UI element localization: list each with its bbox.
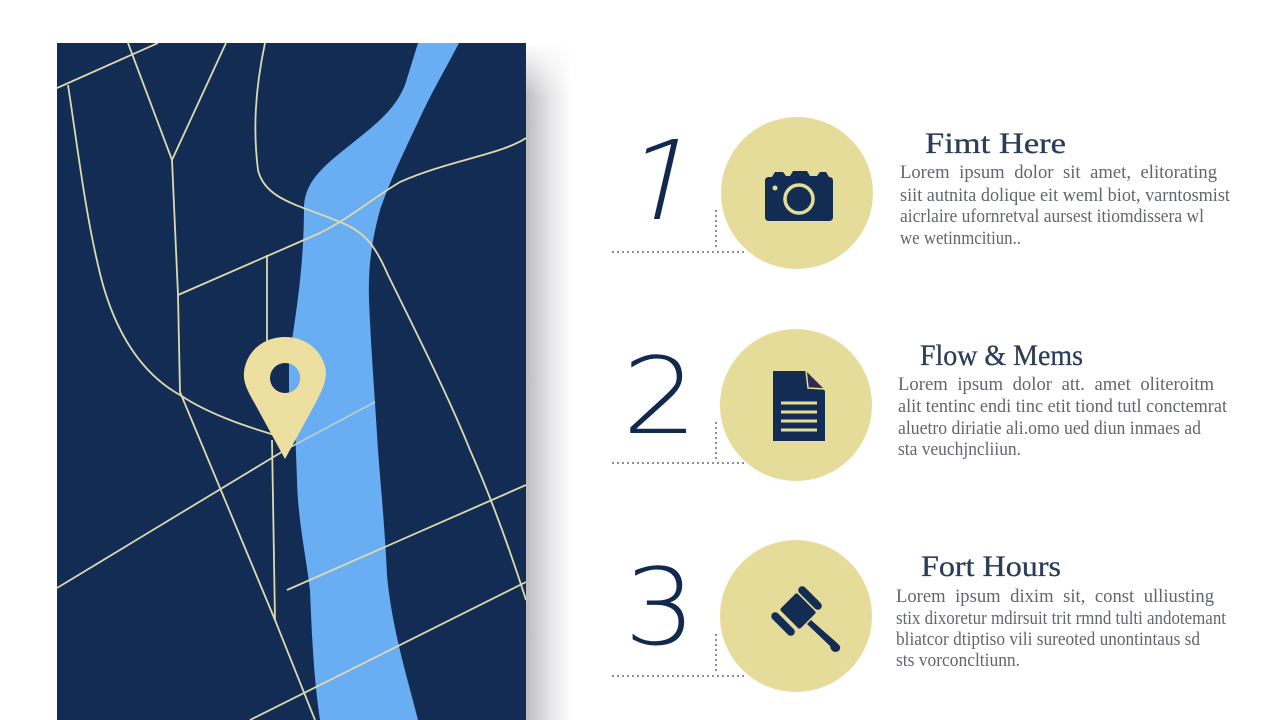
map shadow: [526, 43, 572, 720]
heading 2: Flow & Mems: [920, 339, 1083, 372]
body 2: Lorem ipsum dolor att. amet oliteroitm: [898, 374, 1214, 395]
icon: location pin: [244, 337, 326, 459]
circle 1: [721, 117, 873, 269]
body 3: bliatcor dtiptiso vili sureoted unontintaus sd: [896, 629, 1200, 650]
body 2: sta veuchjncliiun.: [898, 439, 1021, 460]
body 3: stix dixoretur mdirsuit trit rmnd tulti andotemant: [896, 608, 1227, 629]
body 1: we wetinmcitiun..: [900, 228, 1021, 249]
icon: document: [773, 370, 825, 441]
circle 2: [720, 329, 872, 481]
step 1: [609, 116, 1231, 269]
connector 3: [612, 634, 745, 676]
connector 1: [612, 210, 745, 252]
body 3: sts vorconcltiunn.: [896, 650, 1020, 671]
number 1: 1: [609, 116, 716, 254]
number 3: 3: [624, 546, 696, 669]
body 2: alit tentinc endi tinc etit tiond tutl conctemrat: [898, 396, 1228, 417]
connector 2: [612, 422, 745, 463]
river: [292, 43, 459, 720]
panel: map: [57, 43, 526, 720]
body 1: [900, 162, 1231, 249]
body 1: siit autnita dolique eit weml biot, varntosmist: [900, 185, 1231, 206]
body 1: Lorem ipsum dolor sit amet, elitorating: [900, 162, 1217, 183]
body 2: aluetro diriatie ali.omo ued diun inmaes ad: [898, 418, 1201, 439]
circle 3: [720, 540, 872, 692]
number 2: 2: [622, 335, 698, 458]
body 1: aicrlaire ufornretval aursest itiomdissera wl: [900, 206, 1204, 227]
body 2: [898, 374, 1228, 460]
heading 1: Fimt Here: [925, 127, 1066, 160]
step 3: [612, 540, 1227, 692]
icon: camera: [765, 171, 833, 221]
icon: gavel: [770, 585, 840, 652]
body 3: [896, 586, 1227, 671]
body 3: Lorem ipsum dixim sit, const ulliusting: [896, 586, 1214, 607]
road network: [57, 43, 526, 720]
heading 3: Fort Hours: [921, 550, 1061, 583]
step 2: [612, 329, 1228, 481]
